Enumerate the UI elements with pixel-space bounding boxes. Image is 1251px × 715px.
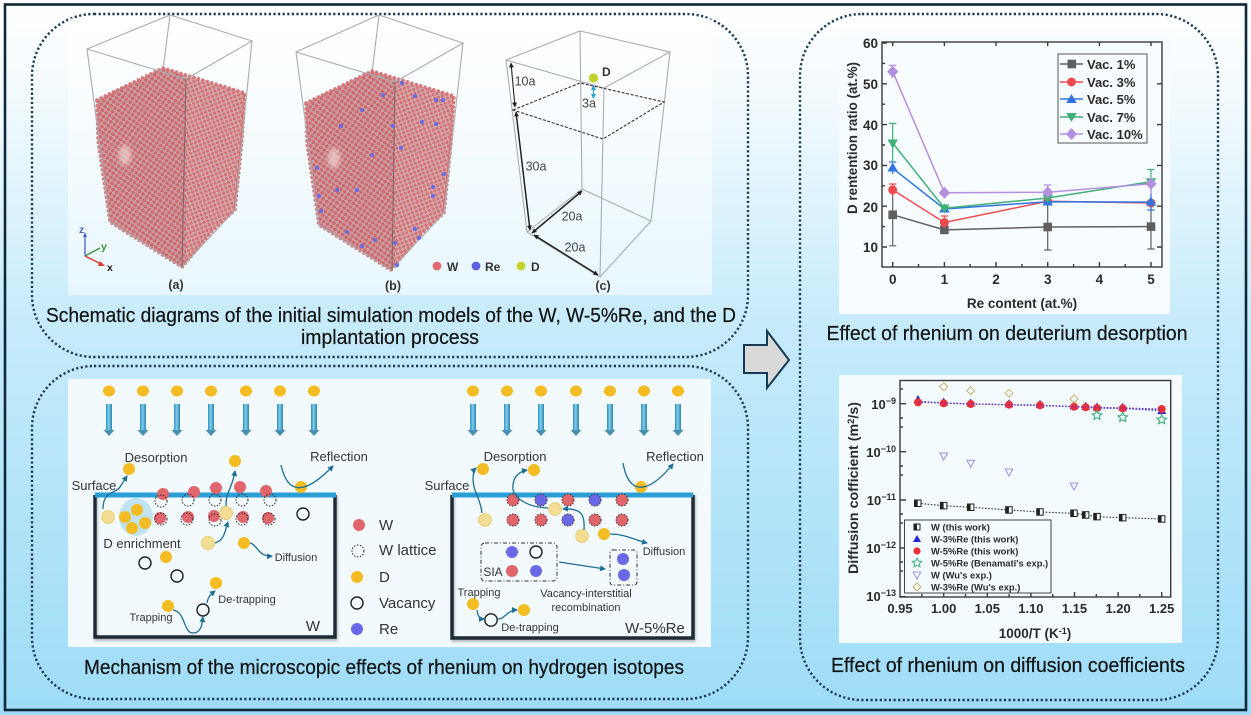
chart 1 legend: Vac. 7% [1087,110,1136,125]
legend: mechanism: W [379,517,394,534]
axis triad icon: z [79,224,84,236]
process labels: Trapping [457,587,501,599]
chart 2 axes: 10 [866,589,881,604]
dimension labels: 30a [526,160,546,174]
chart 1 x axis label: Re content (at.%) [967,296,1077,311]
process arrows [103,465,333,633]
process arrows [473,463,673,619]
dimension labels: D [602,65,611,79]
vacancies [139,508,309,616]
chart: D retention ratio [845,36,1162,311]
chart 2 x axis label: -1 [1059,626,1067,636]
SIA group [481,543,557,581]
series: Vac. 3% [888,184,1156,228]
W-5%Re schematic box [425,449,704,640]
series: Vac. 1% [888,184,1155,250]
series: Vac. 5% [888,162,1156,212]
chart 2 legend: W-5%Re (Benamati's exp.) [931,558,1048,568]
legend: W Re D [433,260,540,274]
chart 2 x axis label: 1000/T (K [999,626,1059,641]
incident D atoms, W-5%Re side [467,386,684,436]
chart 2 axes: 1.25 [1149,601,1174,616]
D atom [589,73,598,83]
series: W-5%Re (this work) [914,398,1166,413]
chart 1 y axis label: D rentention ratio (at.%) [845,62,860,214]
D atoms [102,455,307,612]
panel: simulation models [32,14,748,357]
dimension arrow: 20a depth [532,191,582,233]
chart 2 axes: −9 [886,396,896,406]
image background: chart 2 [839,375,1182,643]
process labels [72,449,368,635]
process labels: W [306,618,321,635]
recombination arrow [559,562,605,569]
chart 2 legend: W-3%Re (Wu's exp.) [931,582,1020,592]
lattice atoms W and Re [507,494,628,526]
chart 2 axes: 0.95 [887,601,913,616]
process labels: De-trapping [218,594,276,606]
process labels: recombination [551,602,621,614]
chart 1 axes: 1 [941,272,949,287]
vacancy [485,614,497,626]
chart 2 axes: 1.05 [975,601,1000,616]
chart 2 axes: 10 [866,541,881,556]
chart 1 axes: 20 [863,200,878,215]
caption: mechanism: Mechanism of the microscopic effects of rhenium on hydrogen isotopes [84,657,684,679]
label (a): (a) [168,278,184,292]
dimension arrow: 20a width [534,235,598,275]
chart 2 axes: 10 [867,493,881,508]
D distance arrow [592,86,594,98]
caption: chart 2: Effect of rhenium on diffusion coefficients [831,655,1185,677]
SIA group: SIA [483,565,503,579]
model (b): W-5%Re block [296,15,463,270]
axis triad icon: x [107,262,113,274]
chart 1 legend: Vac. 5% [1087,92,1136,107]
chart 1 axes: 0 [889,272,896,287]
dimension labels: 10a [515,74,535,88]
image background: simulation models [68,18,712,295]
chart 1 legend: Vac. 3% [1087,75,1136,90]
chart 2 axes: 1.20 [1105,601,1131,616]
chart 2 axes: −12 [881,540,896,550]
process labels [425,449,704,637]
dimension labels: 20a [562,210,582,224]
dimension labels: 20a [565,240,585,254]
series: W-3%Re (this work) [914,395,1166,414]
image background: chart 1 [839,36,1170,314]
chart 1 legend: Vac. 1% [1087,57,1136,72]
caption: simulation models: Schematic diagrams of the initial simulation models of the W, W-5%Re, and the D [46,305,736,327]
recombined group [610,550,637,585]
process labels: Diffusion [643,546,685,558]
D enrichment cluster [119,498,153,536]
chart 2 legend: W (Wu's exp.) [931,570,992,580]
process labels: Diffusion [275,552,317,564]
legend: W Re D: Re [485,260,501,274]
legend: mechanism: D [379,569,390,586]
legend: mechanism: Vacancy [379,595,436,612]
chart 2 axes: 1.15 [1062,601,1087,616]
chart 1 axes: 5 [1147,272,1155,287]
chart 2 axes: −11 [881,492,896,502]
chart 2 axes: 1.00 [931,601,956,616]
axis triad icon: y [101,241,107,253]
series: W-5%Re Benamati's exp. [1092,410,1166,424]
chart 2 legend [904,520,1051,593]
caption: chart 1: Effect of rhenium on deuterium desorption [826,323,1188,345]
incident D atoms, W side [103,386,320,436]
label (c): (c) [595,279,611,293]
D atoms [467,463,647,616]
W atoms and lattice [154,481,276,526]
series: W (this work) [914,500,1165,522]
model (c): D implantation box [506,31,670,277]
chart 1 axes: 3 [1044,272,1052,287]
chart 1 axes [863,36,1162,287]
chart 1 axes: 2 [992,272,1000,287]
label (b): (b) [385,279,401,293]
chart 2 x axis label: ) [1067,626,1071,641]
chart 1 axes: 60 [863,36,878,51]
legend: W Re D: W [447,260,459,274]
legend: mechanism: Re [379,621,398,638]
model (a): pure W block [87,15,252,267]
chart 2 axes: −10 [881,444,896,454]
chart 1 axes: 40 [863,118,878,133]
panel: effect charts [800,14,1218,700]
process labels: Reflection [646,449,704,464]
series: Vac. 7% [888,123,1156,214]
legend: W Re D: D [531,260,540,274]
chart 2 legend: W (this work) [931,522,990,532]
process labels: W-5%Re [625,620,685,637]
chart 2 axes: 10 [871,397,886,412]
process labels: D enrichment [103,536,181,551]
chart 1 axes: 50 [863,77,878,92]
chart 1 legend: Vac. 10% [1087,127,1143,142]
process labels: Surface [72,478,116,493]
chart 2 y axis label: 2 [846,419,856,424]
legend: mechanism [351,517,437,638]
process labels: Desorption [484,449,546,464]
chart 1 axes: 30 [863,158,878,173]
chart 2 axes: 1.10 [1018,601,1044,616]
axis triad icon [79,224,113,274]
process labels: Desorption [125,450,187,465]
chart: diffusion coefficient [846,380,1174,641]
dimension labels [515,65,611,254]
dimension arrow: 30a [516,112,530,230]
chart 1 axes: 4 [1096,272,1104,287]
W schematic box [72,449,368,639]
arrow: left panels to right panel [744,331,789,388]
process labels: Reflection [310,449,368,464]
chart 2 axes: 10 [866,445,881,460]
chart 2 legend: W-5%Re (this work) [931,546,1018,556]
caption line 2: implantation process [301,327,479,349]
chart 2 y axis label: Diffusion cofficient (m [846,432,861,574]
image background: mechanism [68,379,711,647]
dimension labels: 3a [582,96,596,110]
process labels: Trapping [129,612,173,624]
process labels: Surface [425,478,469,493]
dimension arrow: 10a [511,63,515,107]
chart 2 axes: −13 [881,588,896,598]
series: W Wu's exp. [940,453,1078,490]
series: W-3%Re Wu's exp. [940,383,1078,403]
process labels: Vacancy-interstitial [540,588,632,600]
chart 2 axes [866,380,1174,616]
chart 1 axes: 10 [863,240,878,255]
chart 2 y axis label: /s) [846,402,861,419]
chart 2 legend: W-3%Re (this work) [931,534,1018,544]
series: Vac. 10% [887,65,1157,199]
process labels: De-trapping [501,622,559,634]
chart 1 legend [1058,54,1147,143]
legend: mechanism: W lattice [379,542,437,559]
panel: microscopic mechanism [32,366,748,699]
